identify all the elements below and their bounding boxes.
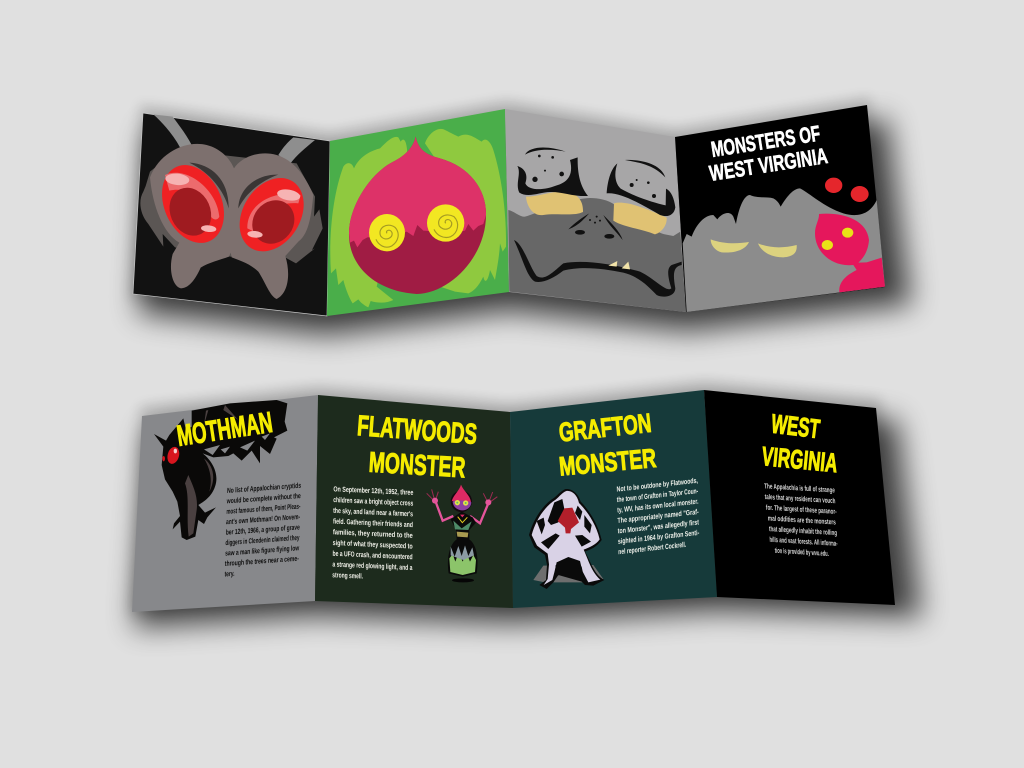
text: mothman story: most famous of them, Point Pleas- <box>226 502 301 516</box>
text: west virginia intro: tion is provided by wvu.edu. <box>775 546 829 558</box>
text: west virginia intro: for. The largest of these paranor- <box>766 503 837 516</box>
icon: grafton monster figure <box>529 489 604 589</box>
text: flatwoods story: children saw a bright object cross <box>333 495 413 508</box>
text: grafton story: ton Monster", was allegedly first <box>618 517 700 535</box>
panel: grafton page <box>510 390 717 608</box>
text: mothman story: tery. <box>224 569 235 578</box>
text: flatwoods story: field. Gathering their friends and <box>333 517 413 529</box>
text: grafton story: Not to be outdone by Flatwoods, <box>616 476 698 494</box>
text: west virginia intro: The Appalachia is full of strange <box>764 481 835 495</box>
heading: grafton monster <box>557 408 657 482</box>
text: west virginia intro: mal oddities are the monsters <box>768 513 836 527</box>
heading: grafton monster: MONSTER <box>558 443 657 482</box>
heading: west virginia: VIRGINIA <box>760 441 839 478</box>
text: grafton story <box>616 476 700 556</box>
title: monsters of west virginia <box>708 121 829 186</box>
text: flatwoods story: sight of what they suspected to <box>333 538 413 551</box>
text: west virginia intro: that allegedly inhabit the rolling <box>769 524 837 537</box>
text: flatwoods story: On September 12th, 1952, three <box>333 484 413 497</box>
heading: flatwoods monster: FLATWOODS <box>356 410 478 451</box>
heading: west virginia <box>760 409 839 478</box>
heading: mothman: MOTHMAN <box>175 406 275 453</box>
bottom strip shadow <box>130 381 922 628</box>
text: grafton story: sighted in 1964 by Grafton Senti- <box>618 528 700 546</box>
text: grafton story: the town of Grafton in Taylor Coun- <box>617 486 699 504</box>
icon: flatwoods figure <box>427 485 497 582</box>
text: mothman story: through the trees near a ceme- <box>225 554 299 568</box>
panel: title cover <box>675 105 885 312</box>
top strip shadow <box>130 96 912 336</box>
icon: flatwoods glyph <box>815 178 885 292</box>
heading: grafton monster: GRAFTON <box>557 408 653 448</box>
text: west virginia intro: hills and vast forests. All informa- <box>769 535 838 548</box>
text: west virginia intro <box>764 481 839 559</box>
text: mothman story: diggers in Clendenin claimed they <box>225 533 300 547</box>
text: flatwoods story: strong smell. <box>332 570 363 581</box>
panel: flatwoods page <box>315 395 513 608</box>
panel: flatwoods cover <box>327 109 509 316</box>
text: flatwoods story: the sky, and land near a farmer's <box>333 506 413 518</box>
panel: west virginia page <box>704 390 895 605</box>
landscape <box>683 188 885 312</box>
heading: flatwoods monster <box>356 410 478 484</box>
text: mothman story: ant's own Mothman! On Novem- <box>226 512 301 526</box>
text: mothman story: would be complete without the <box>226 491 301 505</box>
text: mothman story: No list of Appalochian cryptids <box>227 481 301 495</box>
eyes <box>711 239 797 257</box>
panel: mothman page <box>132 395 318 612</box>
text: grafton story: nel reporter Robert Cockrell. <box>618 540 686 556</box>
panel: grafton cover <box>505 109 686 312</box>
text: mothman story: ber 12th, 1966, a group of grave <box>226 522 300 537</box>
text: grafton story: The appropriately named "Graf- <box>617 507 699 525</box>
title: monsters of west virginia: WEST VIRGINIA <box>708 143 829 186</box>
text: flatwoods story: be a UFO crash, and encountered <box>333 549 413 561</box>
title: monsters of west virginia: MONSTERS OF <box>709 121 822 162</box>
text: mothman story <box>224 481 302 579</box>
icon: mothman figure <box>154 400 287 540</box>
text: flatwoods story: a strange red glowing light, and a <box>332 559 413 572</box>
heading: west virginia: WEST <box>770 409 822 444</box>
text: flatwoods story <box>332 484 414 583</box>
text: west virginia intro: tales that any resident can vouch <box>765 492 836 505</box>
text: grafton story: ty, WV, has its own local monster. <box>617 497 699 515</box>
text: mothman story: saw a man like figure flying low <box>225 543 300 558</box>
text: flatwoods story: families, they returned to the <box>333 527 413 540</box>
heading: flatwoods monster: MONSTER <box>368 447 467 484</box>
icon: grafton monster face <box>508 148 686 312</box>
panel: mothman cover <box>133 113 330 316</box>
icon: mothman face <box>140 114 323 299</box>
icon: flatwoods monster face <box>330 129 506 307</box>
